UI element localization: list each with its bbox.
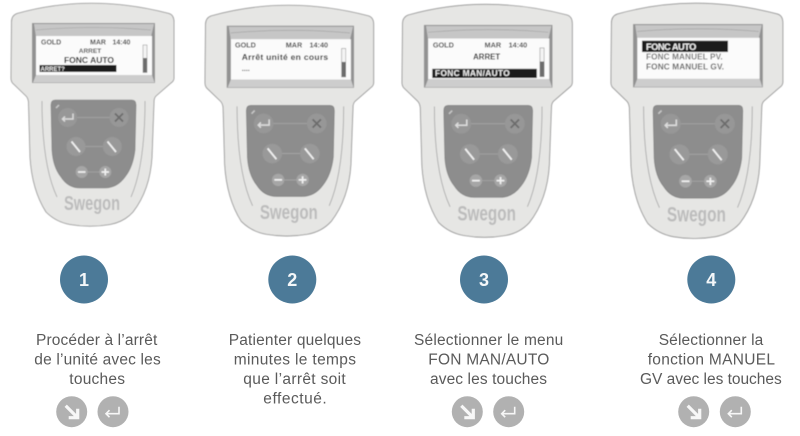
instruction text 4: GV avec les touches xyxy=(640,371,782,388)
device: screen showing FONC MAN/AUTO: Swegon xyxy=(457,202,516,225)
step number 1 xyxy=(60,256,108,304)
device: screen showing function menu: FONC AUTO xyxy=(646,42,696,52)
instruction text 3: avec les touches xyxy=(430,371,547,388)
panel: step 1 xyxy=(11,3,174,427)
device: screen showing ARRET?: FONC AUTO xyxy=(64,55,114,65)
icon: arrow key xyxy=(452,396,483,427)
instruction text 1: de l’unité avec les xyxy=(34,352,161,369)
instruction text 2: que l’arrêt soit xyxy=(243,371,346,388)
icon: arrow key xyxy=(56,396,87,427)
device: screen showing stop in progress: GOLD xyxy=(235,40,256,49)
instruction text 1: touches xyxy=(69,371,125,388)
device: screen showing stop in progress: Swegon xyxy=(260,201,318,224)
step number 2 xyxy=(268,256,316,304)
device: screen showing ARRET?: MAR xyxy=(90,39,106,46)
device: screen showing ARRET?: ARRET? xyxy=(40,67,65,73)
device: screen showing function menu xyxy=(611,3,783,238)
device: screen showing stop in progress xyxy=(205,5,374,236)
step number 3: 3 xyxy=(479,270,489,290)
step number 4 xyxy=(687,256,735,304)
device: screen showing ARRET?: GOLD xyxy=(41,39,61,46)
panel: step 2 xyxy=(205,5,374,407)
device: screen showing FONC MAN/AUTO: FONC MAN/AUTO xyxy=(435,68,510,78)
device: screen showing stop in progress: MAR xyxy=(286,40,303,49)
instruction text 3 xyxy=(414,332,563,388)
instruction text 1: Procéder à l’arrêt xyxy=(36,332,158,349)
instruction text 3: FON MAN/AUTO xyxy=(428,352,549,369)
icon: arrow key xyxy=(678,396,709,427)
device: screen showing function menu: FONC MANUEL GV. xyxy=(646,62,724,71)
device: screen showing stop in progress: 14:40 xyxy=(310,40,328,49)
panel: step 3 xyxy=(402,4,572,427)
instruction text 4: Sélectionner la xyxy=(659,332,764,349)
device: screen showing ARRET? xyxy=(11,3,174,226)
device: screen showing ARRET?: Swegon xyxy=(64,193,120,215)
device: screen showing function menu: FONC MANUEL PV. xyxy=(646,52,723,61)
instruction text 4 xyxy=(640,332,782,388)
step number 4: 4 xyxy=(706,270,716,290)
icon: enter key xyxy=(98,396,128,427)
step number 3 xyxy=(460,256,508,304)
device: screen showing FONC MAN/AUTO: 14:40 xyxy=(509,41,527,50)
instruction text 2: Patienter quelques xyxy=(229,332,361,349)
device: screen showing FONC MAN/AUTO xyxy=(402,4,572,237)
device: screen showing ARRET?: ARRET xyxy=(79,48,101,55)
step number 1: 1 xyxy=(79,270,89,290)
device: screen showing stop in progress: .... xyxy=(242,64,250,73)
instruction text 2: minutes le temps xyxy=(234,352,356,369)
device: screen showing ARRET?: 14:40 xyxy=(112,39,131,46)
instruction text 2: effectué. xyxy=(263,390,327,408)
device: screen showing FONC MAN/AUTO: ARRET xyxy=(473,52,500,61)
device: screen showing function menu: Swegon xyxy=(667,203,726,226)
instruction text 1 xyxy=(34,332,161,388)
icon: enter key xyxy=(493,396,524,427)
step number 2: 2 xyxy=(287,270,297,290)
instruction text 2 xyxy=(229,332,361,408)
device: screen showing FONC MAN/AUTO: GOLD xyxy=(433,41,454,50)
device: screen showing stop in progress: Arrêt unité en cours xyxy=(242,52,328,62)
panel: step 4 xyxy=(611,3,783,427)
icon: enter key xyxy=(720,396,751,427)
device: screen showing FONC MAN/AUTO: MAR xyxy=(485,41,502,50)
instruction text 4: fonction MANUEL xyxy=(648,352,775,369)
instruction text 3: Sélectionner le menu xyxy=(414,332,563,349)
